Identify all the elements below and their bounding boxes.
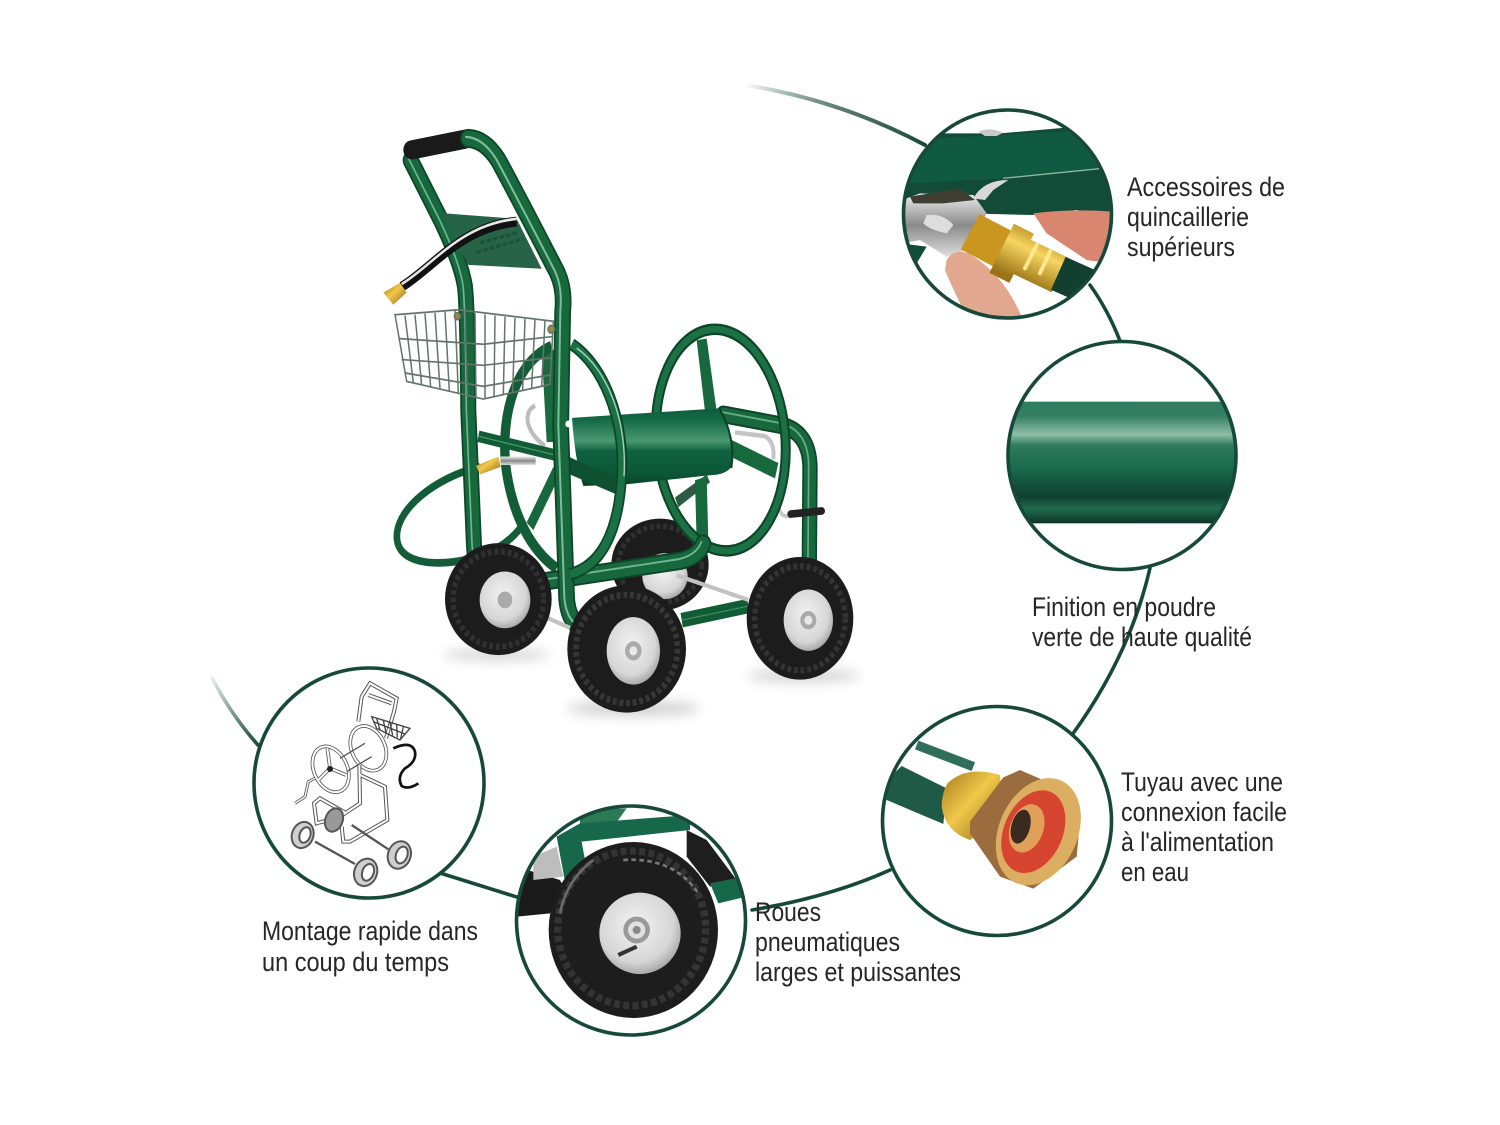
text: hose connection: Tuyau avec une: [1121, 767, 1283, 797]
text: assembly: [262, 916, 478, 977]
front reel back half and spokes: [505, 346, 558, 568]
crank handle: [780, 511, 822, 516]
text: powder finish: Finition en poudre: [1032, 592, 1216, 622]
text: hardware: supérieurs: [1127, 232, 1235, 262]
rear wheel: [611, 519, 709, 611]
circle: brass fitting detail: [902, 108, 1114, 320]
text: powder finish: verte de haute qualité: [1032, 622, 1252, 652]
connecting arc line: [212, 85, 1150, 910]
circle: pneumatic wheel: [507, 800, 753, 1040]
circle: assembly diagram: [254, 668, 484, 898]
text: hardware: Accessoires de: [1127, 172, 1285, 202]
reel drum: [570, 408, 733, 494]
hose loop: [397, 467, 522, 563]
text: wheels: [755, 897, 961, 987]
back panel: [442, 213, 542, 269]
ground shadows: [443, 649, 860, 716]
handle grip: [412, 139, 465, 150]
rear frame tube: [722, 412, 810, 559]
text: assembly: Montage rapide dans: [262, 916, 478, 946]
text: hose connection: connexion facile: [1121, 797, 1287, 827]
cross bars: [478, 436, 748, 620]
rear reel ring: [646, 322, 795, 558]
upper hose with brass nozzle: [383, 219, 517, 305]
text: hose connection: en eau: [1121, 857, 1189, 887]
text: powder finish: [1032, 592, 1252, 652]
right wheel: [747, 557, 853, 680]
text: hardware: quincaillerie: [1127, 202, 1249, 232]
text: hose connection: à l'alimentation: [1121, 827, 1274, 857]
right frame tube: [466, 137, 578, 626]
front reel front half: [565, 344, 624, 574]
text: wheels: larges et puissantes: [755, 957, 961, 987]
exploded hose: [393, 745, 418, 787]
left wheel: [445, 543, 552, 655]
text: wheels: Roues: [755, 897, 821, 927]
exploded basket: [372, 717, 410, 740]
rear fittings: [735, 432, 774, 459]
exploded frame: [358, 683, 397, 738]
text: assembly: un coup du temps: [262, 947, 449, 977]
exploded base: [314, 765, 388, 864]
exploded wheels: [288, 806, 415, 889]
hose reel cart: [383, 137, 860, 716]
rear reel spokes: [675, 338, 778, 542]
circle: hose connector: [870, 700, 1112, 940]
connector with brass fitting: [476, 457, 536, 475]
front wheel: [567, 585, 686, 713]
text: wheels: pneumatiques: [755, 927, 900, 957]
wire basket: [395, 310, 555, 399]
rear axle rods: [513, 575, 748, 628]
exploded reel: [295, 720, 393, 803]
text: hose connection: [1121, 767, 1287, 887]
left frame tube: [409, 159, 703, 588]
text: hardware: [1127, 172, 1285, 262]
circle: green powder finish: [1000, 333, 1243, 577]
